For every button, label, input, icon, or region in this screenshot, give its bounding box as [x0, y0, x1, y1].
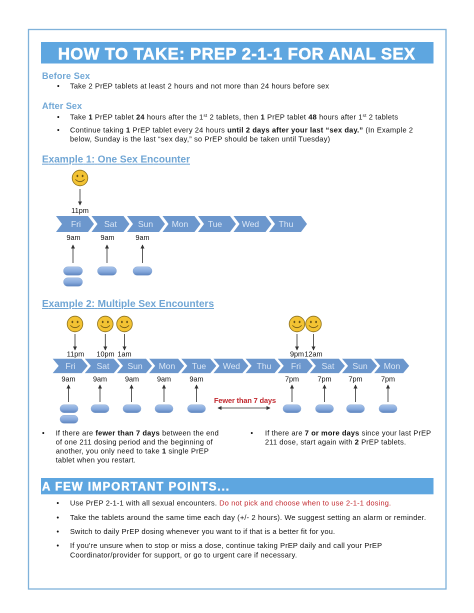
day chevrons: Tue — [208, 219, 222, 229]
dose times: 7pm — [285, 374, 299, 384]
section: before sex — [42, 71, 329, 91]
point 4 — [56, 541, 382, 560]
title banner: HOW TO TAKE: PREP 2-1-1 FOR ANAL SEX — [58, 46, 415, 64]
day chevrons: Sat — [97, 361, 110, 371]
note: fewer than 7 days: of one 211 dosing period and the beginning of — [56, 438, 214, 446]
point 4: If you're unsure when to stop or miss a dose, continue taking PrEP daily and call your PrEP — [70, 541, 382, 550]
point 2: • — [56, 513, 60, 522]
point 3: • — [56, 527, 60, 536]
day chevrons: Sun — [352, 361, 368, 371]
dose times: 7pm — [318, 374, 332, 384]
section: before sex: • — [57, 82, 60, 91]
dose arrows — [68, 385, 388, 402]
callout: fewer than 7 days: Fewer than 7 days — [214, 396, 276, 405]
dose times: 9am — [62, 374, 76, 384]
day chevrons: Wed — [242, 219, 259, 229]
dose times: 9am — [67, 233, 81, 242]
label: 11pm: 11pm — [71, 206, 89, 215]
point 4: Coordinator/provider for support, or go to urgent care if necessary. — [70, 550, 297, 560]
encounter times — [67, 350, 322, 358]
note: fewer than 7 days — [42, 428, 219, 464]
dose times: 9am — [136, 233, 150, 242]
section: after sex: st — [203, 113, 208, 118]
encounter times: 9pm — [290, 350, 304, 358]
section: after sex — [42, 101, 413, 144]
important points list — [56, 499, 426, 560]
section: after sex: 1 PrEP tablet 48 hours after 1 — [261, 112, 362, 122]
section: after sex: • — [57, 126, 60, 134]
example 2 timeline — [53, 316, 409, 423]
section: after sex: Continue taking 1 PrEP tablet every 24 hours until 2 days after your last “sex day.” (In Example 2 — [70, 126, 413, 134]
dose times: 9am — [93, 374, 107, 384]
day chevrons: Fri — [291, 361, 301, 371]
dose times: 9am — [190, 374, 204, 384]
dose times — [62, 374, 395, 384]
heading: example 1: Example 1: One Sex Encounter — [42, 155, 190, 166]
day chevrons: Mon — [384, 361, 401, 371]
encounter times: 12am — [305, 350, 322, 358]
note: 7 or more days: • — [250, 428, 254, 437]
section banner: important points — [41, 478, 434, 494]
dose arrows — [73, 245, 142, 263]
day chevrons: Sun — [138, 219, 153, 229]
day chevrons: Fri — [71, 219, 81, 229]
day chevrons: Thu — [257, 361, 272, 371]
day chevrons: Sat — [322, 361, 335, 371]
day chevrons: Thu — [279, 219, 294, 229]
section: after sex: 2 tablets — [367, 112, 398, 122]
pills — [64, 267, 152, 286]
pills — [60, 405, 397, 423]
note: 7 or more days — [250, 428, 431, 446]
example 1 timeline — [56, 170, 307, 286]
day chevrons: Sat — [104, 219, 118, 229]
heading: example 2: Example 2: Multiple Sex Encounters — [42, 299, 214, 310]
arrow: smiley to 11pm — [79, 189, 81, 205]
section: after sex: 2 tablets, then — [207, 112, 260, 122]
point 3: Switch to daily PrEP dosing whenever you want to if that is a better fit for you. — [70, 527, 335, 536]
point 1: Use PrEP 2-1-1 with all sexual encounters. Do not pick and choose when to use 2-1-1 dosing. — [70, 499, 391, 508]
note: 7 or more days: If there are 7 or more days since your last PrEP — [265, 428, 431, 437]
note: fewer than 7 days: If there are fewer than 7 days between the end — [56, 428, 219, 437]
icon: smiley Friday — [72, 170, 88, 186]
section banner: important points: A FEW IMPORTANT POINTS... — [42, 482, 229, 494]
day chevrons: Sun — [127, 361, 143, 371]
day chevrons: Tue — [192, 361, 206, 371]
section: before sex: Take 2 PrEP tablets at least 2 hours and not more than 24 hours before sex — [70, 82, 329, 91]
arrows: smileys to times — [75, 334, 314, 350]
dose times: 7pm — [349, 374, 363, 384]
encounter times: 11pm — [67, 350, 84, 358]
day chevrons: Fri — [66, 361, 76, 371]
day chevrons: Mon — [172, 219, 189, 229]
point 1: • — [56, 499, 60, 508]
dose times: 9am — [125, 374, 139, 384]
day chevrons — [56, 216, 307, 232]
section: after sex: • — [57, 112, 60, 122]
day chevrons — [53, 359, 409, 373]
note: fewer than 7 days: another, you only need to take 1 single PrEP — [56, 446, 209, 455]
note: fewer than 7 days: tablet when you restart. — [56, 455, 136, 464]
section: after sex: below, Sunday is the last “sex day,” so PrEP should be taken until Tuesday) — [70, 135, 330, 144]
encounter times: 10pm — [97, 350, 114, 358]
section: before sex: Before Sex — [42, 71, 90, 81]
dose times: 7pm — [381, 374, 395, 384]
section: after sex: After Sex — [42, 101, 82, 111]
section: after sex: st — [363, 113, 367, 118]
day chevrons: Mon — [159, 361, 176, 371]
day chevrons: Wed — [223, 361, 240, 371]
dose times — [67, 233, 150, 242]
dose times: 9am — [101, 233, 115, 242]
note: 7 or more days: 211 dose, start again with 2 PrEP tablets. — [265, 438, 406, 446]
dose times: 9am — [157, 374, 171, 384]
icons: smileys — [67, 316, 321, 332]
point 4: • — [56, 541, 60, 550]
encounter times: 1am — [118, 350, 132, 358]
note: fewer than 7 days: • — [42, 428, 45, 437]
section: after sex: Take 1 PrEP tablet 24 hours after the 1 — [70, 112, 203, 122]
point 2: Take the tablets around the same time each day (+/- 2 hours). We suggest setting an alarm or reminder. — [70, 513, 426, 522]
